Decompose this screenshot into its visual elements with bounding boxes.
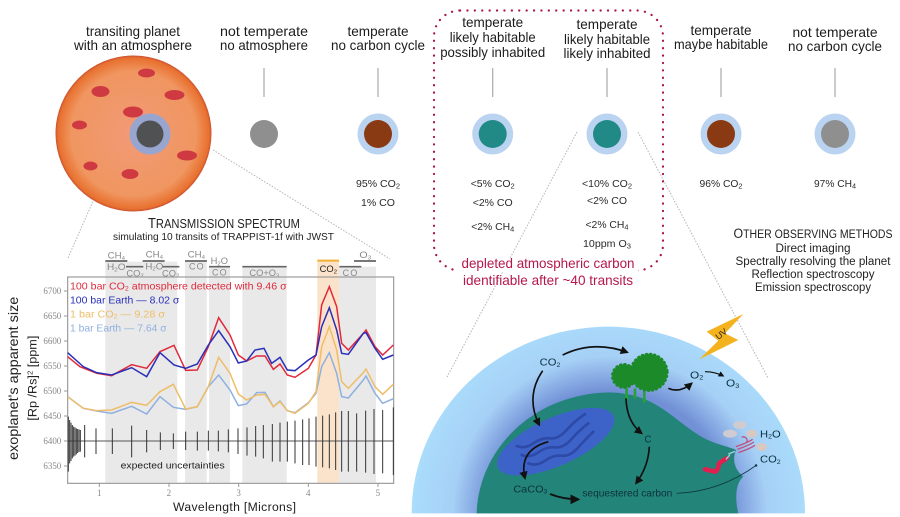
molecule absorption bands: H (107, 262, 113, 272)
cycle labels (513, 358, 781, 500)
y axis titles: 2 (26, 371, 35, 375)
UV lightning bolt: UV (713, 326, 729, 342)
x axis labels: Wavelength [Microns] (173, 500, 296, 514)
cycle labels: H (760, 429, 767, 440)
series: 1 bar CO2 (68, 327, 393, 413)
molecule absorption bands: 4 (160, 255, 163, 261)
column: possibly inhabited: <2% CO (473, 197, 513, 209)
cycle labels: O (690, 370, 698, 381)
y axis titles: exoplanet's apparent size (5, 296, 21, 460)
text block: other observing methods: Reflection spectroscopy (752, 269, 875, 281)
atmosphere (412, 327, 805, 513)
heading: transiting planet (73, 23, 192, 53)
y axis ticks: 6650 (43, 311, 62, 321)
legend: 1 bar Earth — 7.64 σ (70, 323, 167, 334)
molecule absorption bands: 4 (202, 255, 205, 261)
cycle labels: CO (540, 358, 554, 369)
column: likely inhabited (564, 16, 650, 250)
heading: transmission spectrum: simulating 10 transits of TRAPPIST-1f with JWST (113, 231, 335, 243)
molecule absorption bands: CO (320, 264, 333, 274)
x axis labels: 2 (167, 488, 171, 498)
molecule absorption bands: O (359, 250, 366, 260)
molecule absorption bands: CH (108, 251, 121, 261)
column: not temperate no carbon cycle: 4 (852, 182, 856, 190)
chart frame and baseline (68, 277, 394, 483)
legend: 2 (125, 286, 129, 293)
molecule absorption bands: CO (343, 268, 357, 278)
cycle labels: 3 (544, 490, 548, 496)
cycle labels: CaCO (513, 484, 540, 495)
column: likely inhabited: <10% CO (582, 178, 628, 190)
molecule absorption bands: CO (212, 267, 227, 277)
illustration: transiting planet disc (56, 56, 212, 212)
column: temperate no carbon cycle: no carbon cycle (331, 37, 425, 53)
molecule absorption bands: H (145, 261, 152, 271)
cycle labels: O (772, 429, 781, 440)
series: 1 bar Earth (68, 353, 393, 414)
column: possibly inhabited: <2% CH (471, 221, 511, 233)
column: maybe habitable: 2 (738, 182, 742, 190)
column: not temperate no carbon cycle (788, 24, 882, 190)
carbon cycle arrows (524, 347, 723, 499)
molecule absorption bands: 2 (152, 267, 156, 273)
column: possibly inhabited: possibly inhabited (440, 44, 545, 60)
molecule absorption bands: O (221, 256, 228, 266)
cycle labels: sequestered carbon (582, 489, 672, 500)
molecule absorption bands: 3 (368, 255, 371, 261)
molecule absorption bands: CO+O (249, 268, 275, 278)
heading: transiting planet: transiting planet (86, 23, 180, 39)
molecule absorption bands: CO (126, 268, 140, 278)
series: 100 bar CO2 (68, 287, 393, 377)
legend: 2 (114, 314, 118, 321)
column: temperate no carbon cycle: 95% CO (356, 178, 396, 190)
column: maybe habitable: 96% CO (700, 178, 739, 190)
y axis ticks: 6500 (43, 386, 62, 396)
legend: 100 bar CO (70, 281, 120, 292)
column: likely inhabited: 4 (624, 222, 628, 232)
text block: other observing methods: Emission spectroscopy (755, 282, 871, 294)
y axis ticks (43, 286, 378, 487)
column: possibly inhabited: 4 (510, 224, 514, 234)
chart: transmission spectrum (5, 250, 394, 514)
UV lightning bolt (699, 314, 743, 359)
y axis titles (5, 296, 40, 460)
x axis labels: 4 (306, 488, 311, 498)
x axis labels: 1 (97, 488, 101, 498)
heading: transmission spectrum: TRANSMISSION SPECTRUM (148, 215, 300, 232)
molecule absorption bands: H (211, 256, 217, 266)
column: likely inhabited: 10ppm O (583, 238, 626, 250)
molecule absorption bands: O (156, 261, 163, 271)
molecule absorption bands: 4 (122, 256, 125, 262)
column: possibly inhabited (440, 14, 545, 234)
column: temperate no carbon cycle: temperate (348, 23, 409, 39)
molecule absorption bands: 2 (217, 261, 221, 267)
legend: atmosphere detected with 9.46 σ (129, 281, 287, 292)
y axis titles: [Rp /Rs] (26, 377, 40, 421)
column: likely inhabited: likely inhabited (564, 45, 650, 61)
molecule absorption bands (105, 250, 376, 483)
molecule absorption bands: CH (146, 250, 159, 260)
molecule absorption bands: CO (162, 268, 175, 278)
column: not temperate no carbon cycle: no carbon cycle (788, 38, 882, 54)
y axis ticks: 6700 (43, 286, 62, 296)
column: temperate no carbon cycle (331, 23, 425, 209)
y axis ticks: 6400 (43, 436, 62, 446)
illustration: habitable planet carbon cycle (412, 314, 805, 513)
label: expected uncertainties: expected uncertainties (121, 461, 225, 471)
column: not temperate no atmosphere (220, 23, 308, 148)
y axis ticks: 6450 (43, 411, 62, 421)
cycle labels: 2 (768, 435, 773, 441)
column: maybe habitable (674, 22, 768, 190)
callout: depleted atmospheric carbon: identifiable after ~40 transits (463, 272, 633, 288)
cycle labels: O (726, 379, 734, 390)
heading: transmission spectrum (113, 215, 335, 243)
error bars: expected uncertainties (68, 407, 393, 475)
molecule absorption bands: CO (189, 261, 204, 271)
column: not temperate no atmosphere: not temperate (220, 23, 308, 39)
column: likely inhabited: temperate (576, 16, 638, 32)
series: 100 bar Earth (68, 308, 393, 377)
dotted box around habitable candidates (434, 10, 663, 270)
molecule absorption bands: 2 (140, 274, 144, 280)
column: possibly inhabited: temperate (462, 14, 523, 30)
text block: other observing methods: Direct imaging (776, 243, 850, 255)
column: not temperate no atmosphere: no atmosphere (220, 37, 308, 53)
outgassing arrow (677, 465, 757, 493)
molecule absorption bands: CH (188, 250, 201, 260)
column: not temperate no carbon cycle: 97% CH (814, 178, 853, 190)
y axis ticks: 6350 (43, 461, 62, 471)
cycle labels: 3 (735, 384, 740, 390)
column: likely inhabited: <2% CO (587, 195, 627, 207)
column: temperate no carbon cycle: 2 (396, 182, 400, 190)
legend: — 9.28 σ (118, 309, 165, 320)
column: likely inhabited: 3 (627, 242, 631, 250)
column: possibly inhabited: 2 (511, 182, 515, 190)
molecule absorption bands: 2 (176, 274, 179, 280)
column: possibly inhabited: <5% CO (471, 178, 511, 190)
column: possibly inhabited: likely habitable (450, 29, 536, 45)
cycle labels: CO (760, 455, 774, 466)
text block: other observing methods (734, 226, 893, 294)
molecule absorption bands: 2 (334, 269, 337, 275)
column: likely inhabited: <2% CH (586, 219, 625, 231)
cycle labels: 2 (556, 363, 561, 369)
legend (70, 281, 287, 334)
planet surface (477, 393, 743, 513)
heading: transiting planet: with an atmosphere (73, 37, 192, 53)
x axis labels (97, 488, 381, 514)
y axis ticks: 6550 (43, 361, 62, 371)
molecule absorption bands: O (118, 262, 126, 272)
molecule absorption bands: 3 (276, 273, 279, 279)
column: likely inhabited: 2 (628, 182, 632, 190)
cycle labels: 2 (777, 460, 781, 466)
callout: depleted atmospheric carbon (458, 255, 638, 288)
lake with waves (488, 394, 623, 489)
cycle labels: 2 (699, 376, 704, 382)
dotted zoom lines (68, 132, 768, 378)
legend: 1 bar CO (70, 309, 109, 320)
column: maybe habitable: temperate (690, 22, 752, 38)
volcano with lava and vapour (705, 421, 767, 472)
text block: other observing methods: Spectrally resolving the planet (736, 256, 891, 268)
y axis titles: [ppm] (26, 336, 40, 371)
x axis labels: 3 (236, 488, 241, 498)
trees (613, 355, 667, 403)
column: likely inhabited: likely habitable (564, 31, 650, 47)
legend: 100 bar Earth — 8.02 σ (70, 295, 179, 306)
column: not temperate no carbon cycle: not temperate (792, 24, 878, 40)
column: temperate no carbon cycle: 1% CO (361, 197, 395, 209)
column: maybe habitable: maybe habitable (674, 36, 768, 52)
molecule absorption bands: 2 (114, 267, 118, 273)
cycle labels: C (645, 435, 652, 446)
callout: depleted atmospheric carbon: depleted atmospheric carbon (462, 255, 634, 271)
y axis ticks: 6600 (43, 336, 62, 346)
x axis labels: 5 (376, 488, 381, 498)
